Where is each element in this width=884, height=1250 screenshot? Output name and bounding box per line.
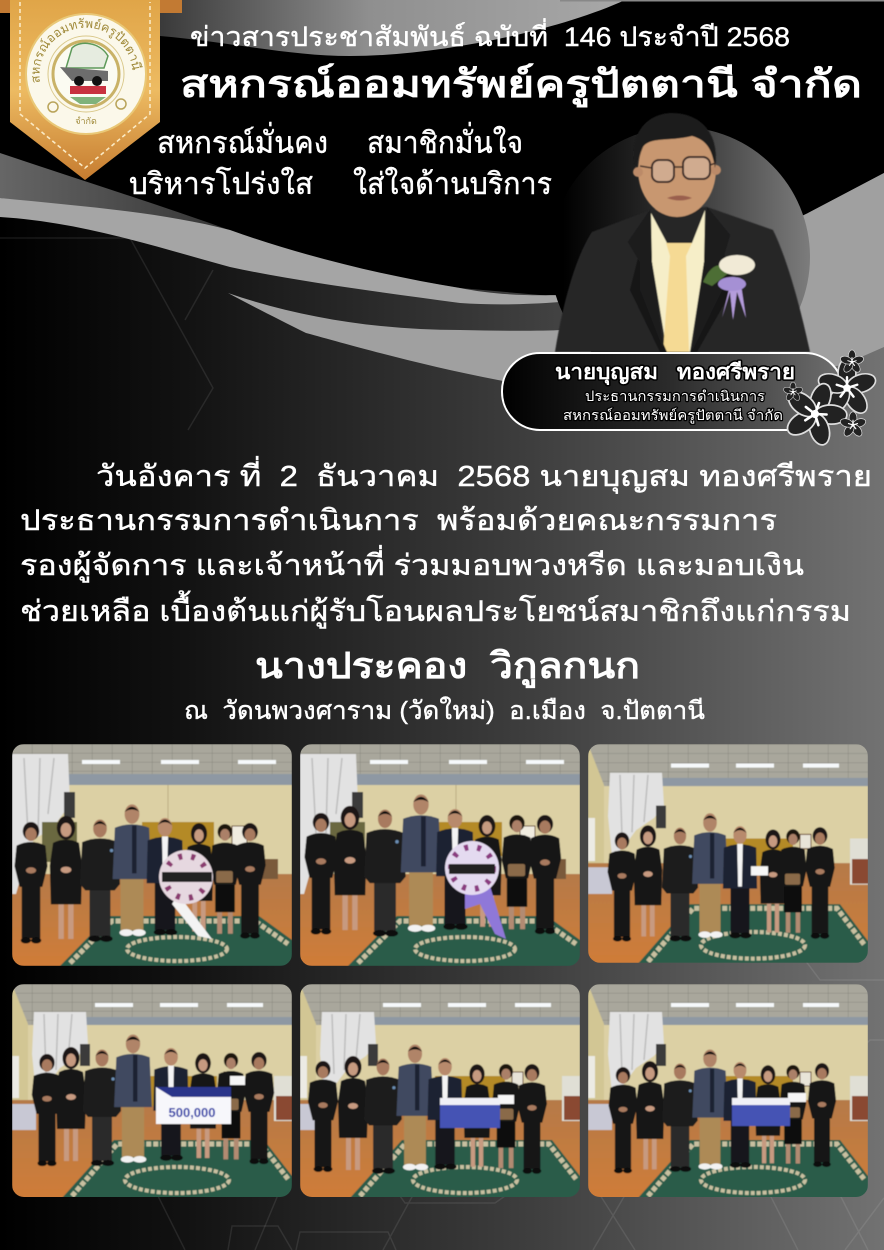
lower grey swoosh [228,173,884,395]
donation board [156,1087,231,1124]
donation board: 500,000 [168,1105,216,1120]
photo: wreath white ribbon [12,744,292,966]
logo seal [25,13,147,135]
slogan: สหกรณ์มั่นคง [157,122,328,160]
logo seal: สหกรณ์ออมทรัพย์ครูปัตตานี [32,18,143,83]
body paragraph: วันอังคาร ที่ 2 ธันวาคม 2568 นายบุญสม ทองศรีพราย [96,456,872,494]
photo: wreath purple ribbon [300,744,580,966]
slogan: บริหารโปร่งใส [129,166,313,201]
photo: donation board 500,000 [12,984,292,1200]
name plate: นายบุญสม ทองศรีพราย [555,360,795,386]
body paragraph: ช่วยเหลือ เบื้องต้นแก่ผู้รับโอนผลประโยชน์สมาชิกถึงแก่กรรม [20,590,851,629]
body paragraph [20,456,872,629]
banner with logo [0,0,182,180]
portrait of chairman [555,113,810,352]
venue line: ณ วัดนพวงศาราม (วัดใหม่) อ.เมือง จ.ปัตตานี [184,696,705,725]
name plate: สหกรณ์ออมทรัพย์ครูปัตตานี จำกัด [563,407,783,424]
top grey swoosh [160,0,625,56]
gold pennant [10,0,160,180]
portrait circle backdrop [556,130,810,352]
flower decoration [773,350,878,455]
slogan [129,122,552,201]
top hairline [560,0,884,2]
slogan: ใส่ใจด้านบริการ [353,167,552,201]
photo: handing envelope [588,744,868,966]
top black area with swoosh cut [0,0,884,297]
deceased member name: นางประคอง วิกูลกนก [255,645,640,689]
photo: blue board second [588,984,868,1200]
body paragraph: ประธานกรรมการดำเนินการ พร้อมด้วยคณะกรรมการ [20,505,777,537]
name plate: ประธานกรรมการดำเนินการ [585,388,765,404]
title: cooperative name: สหกรณ์ออมทรัพย์ครูปัตตานี จำกัด [180,63,862,108]
logo seal: จำกัด [75,116,97,126]
name plate [502,353,843,430]
heading: newsletter issue: ข่าวสารประชาสัมพันธ์ ฉบับที่ 146 ประจำปี 2568 [190,18,790,52]
dark grey left swoosh [0,153,235,232]
ribbon bar [0,0,182,13]
body paragraph: รองผู้จัดการ และเจ้าหน้าที่ ร่วมมอบพวงหรีด และมอบเงิน [20,545,804,583]
photo: blue board [300,984,580,1200]
slogan: สมาชิกมั่นใจ [367,122,523,160]
light grey middle swoosh [0,198,560,304]
stitching [20,2,150,168]
